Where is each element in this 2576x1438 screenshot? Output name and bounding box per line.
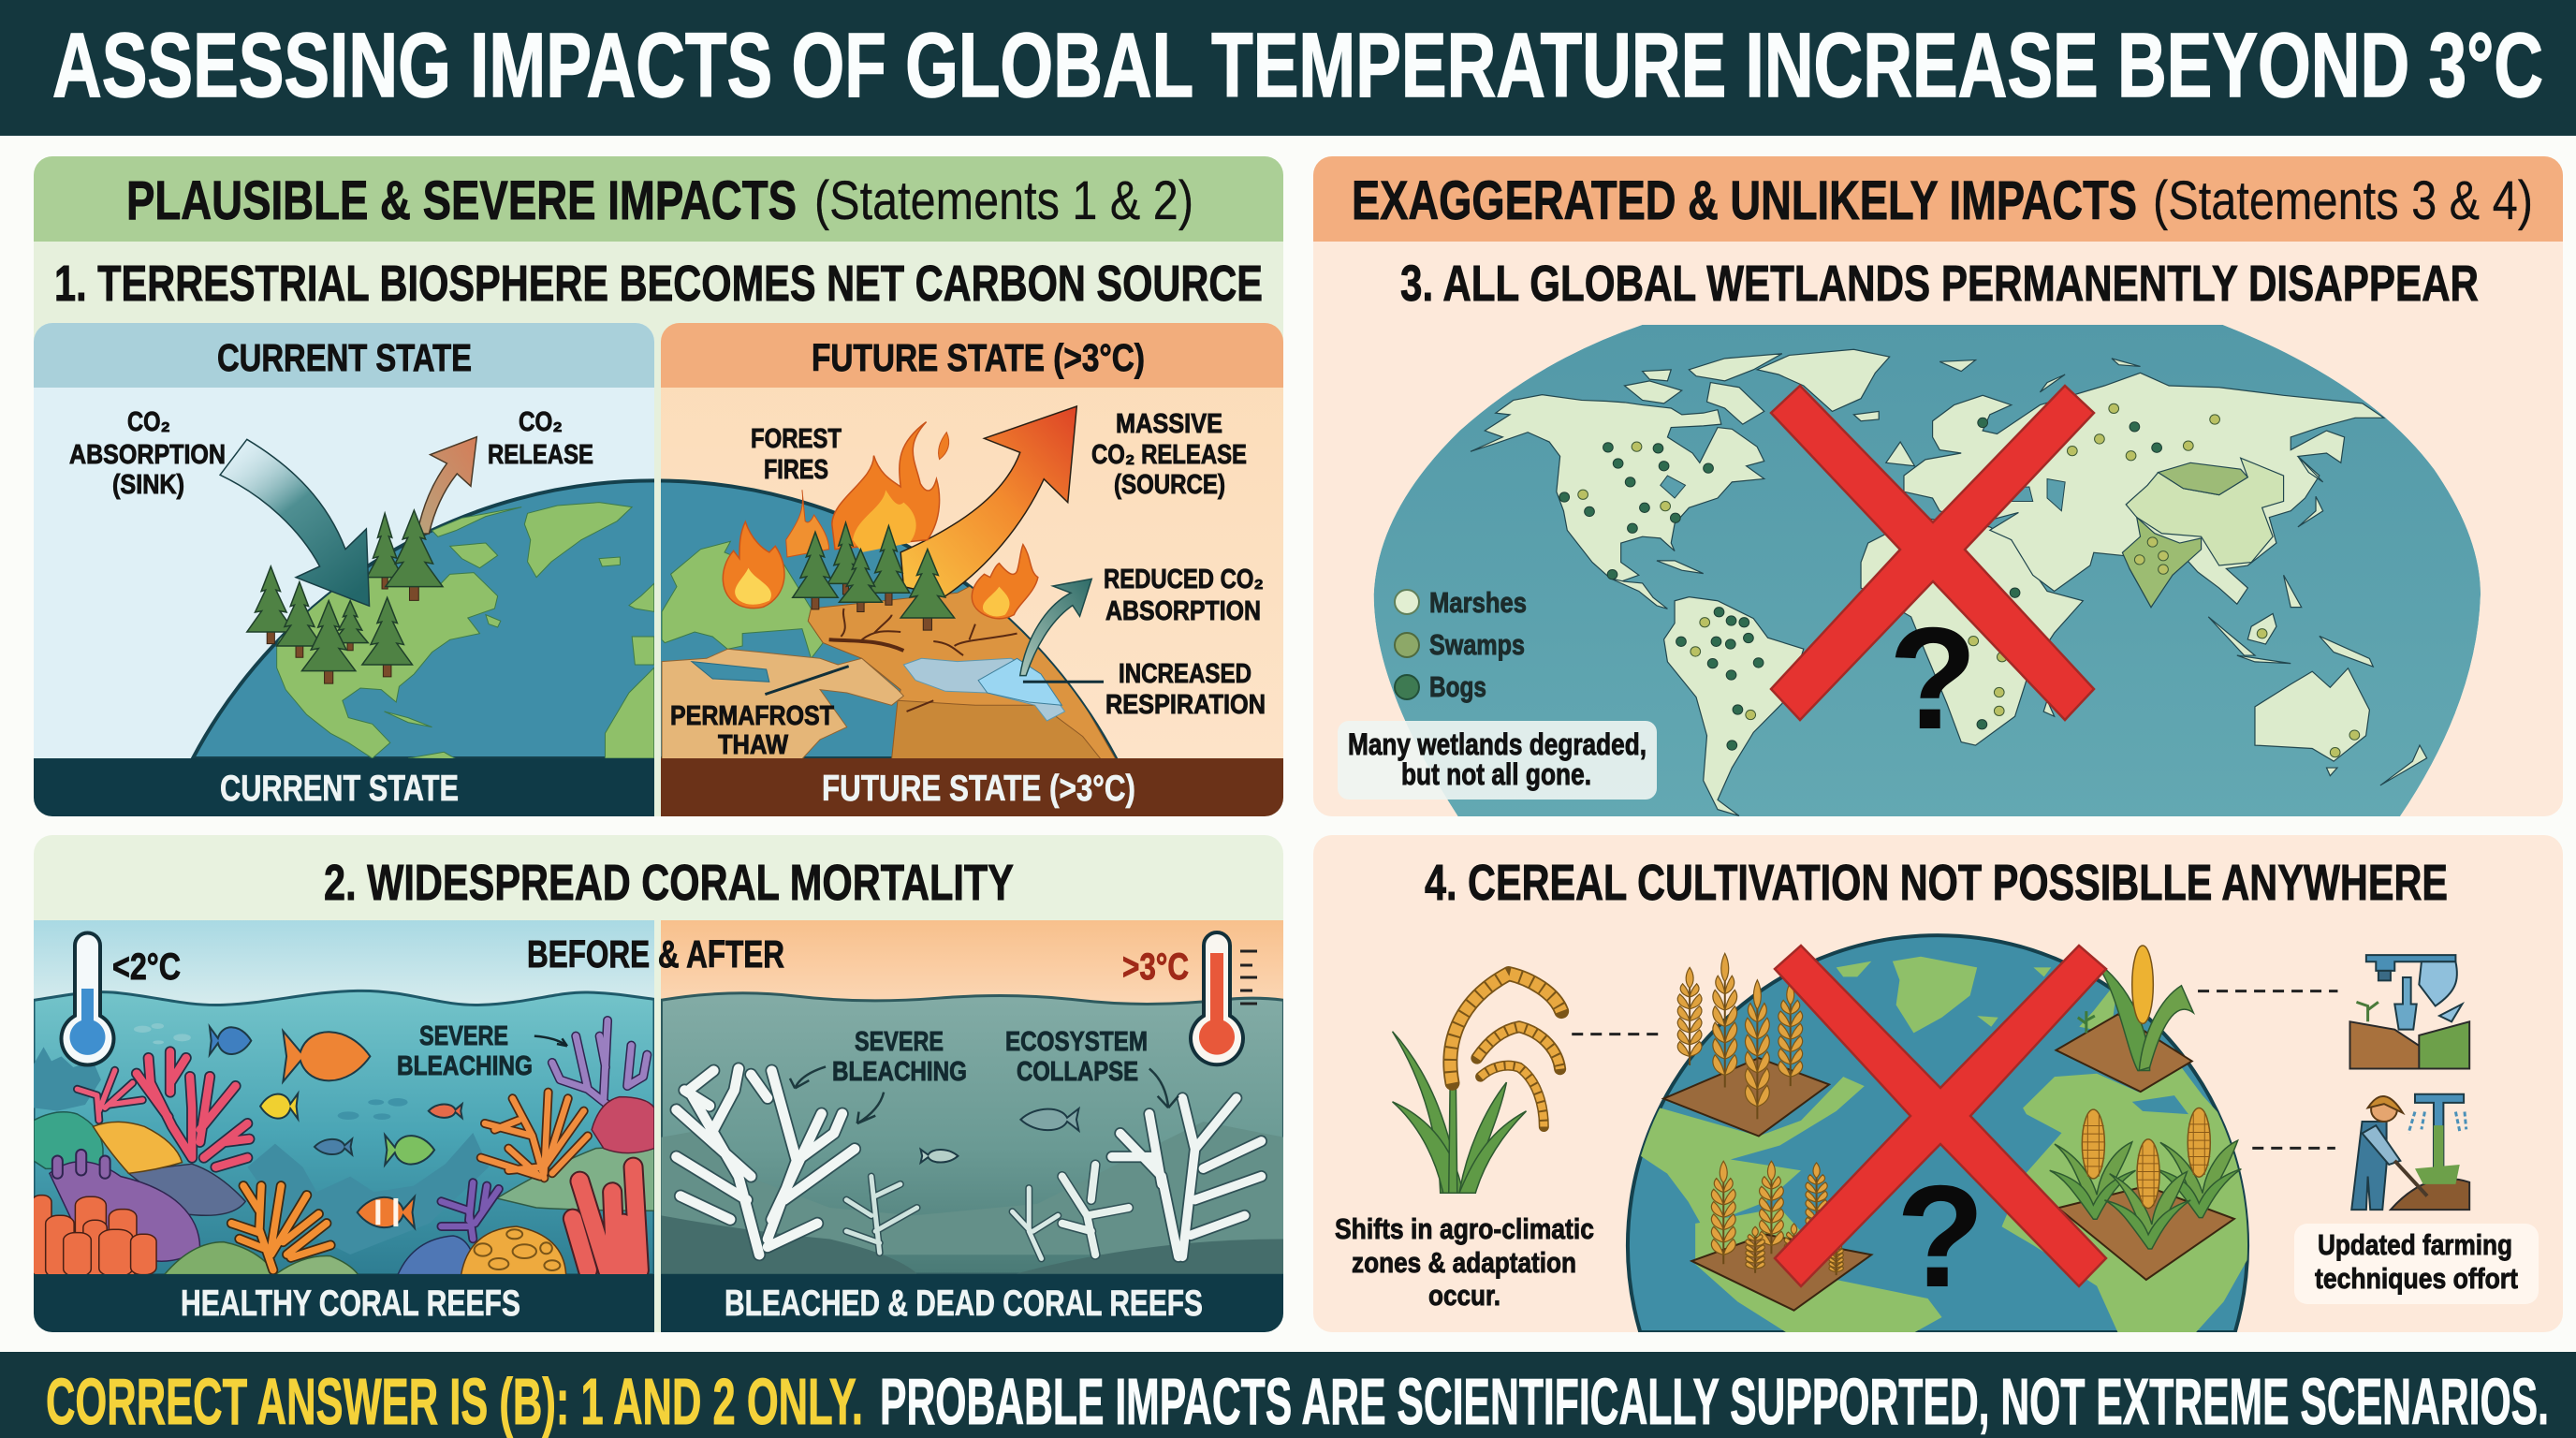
land masses bbox=[1471, 349, 2427, 815]
header labels: current and future: FUTURE STATE (>3°C) bbox=[812, 336, 1145, 379]
icon: large flames bbox=[786, 422, 949, 557]
panel: statement 2 coral mortality bbox=[32, 835, 1283, 1332]
labels: forest fires: FIRES bbox=[764, 455, 828, 485]
icon: farmer with sprinkler bbox=[2351, 1094, 2469, 1210]
labels: increased respiration: INCREASED bbox=[1119, 659, 1251, 689]
label: ecosystem collapse: COLLAPSE bbox=[1017, 1057, 1138, 1087]
arrows: bleaching and collapse leaders bbox=[790, 1066, 1178, 1123]
bottom label bars: coral bbox=[34, 1274, 1283, 1332]
heading: statement 1: 1. TERRESTRIAL BIOSPHERE BECOMES NET CARBON SOURCE bbox=[54, 256, 1263, 312]
labels: CO2 release bbox=[489, 411, 593, 464]
globe with crop fields bbox=[1625, 935, 2259, 1333]
label: severe bleaching right: BLEACHING bbox=[832, 1057, 967, 1087]
header labels: current and future bbox=[218, 343, 1144, 379]
callout: wetlands degraded: but not all gone. bbox=[1401, 757, 1591, 791]
icon: red cross over globe bbox=[1775, 946, 2106, 1286]
bottom label bars: CURRENT STATE bbox=[220, 769, 459, 809]
labels: CO2 absorption sink: ABSORPTION bbox=[69, 440, 226, 470]
legend: wetland types: Marshes bbox=[1429, 586, 1527, 619]
labels: CO2 absorption sink bbox=[69, 407, 226, 500]
dashed connectors bbox=[1572, 991, 2337, 1148]
labels: massive CO2 release: CO₂ RELEASE bbox=[1091, 440, 1247, 470]
labels: massive CO2 release: MASSIVE bbox=[1116, 409, 1222, 439]
labels: CO2 absorption sink: CO₂ bbox=[127, 407, 170, 437]
leader line: permafrost thaw bbox=[765, 667, 849, 695]
crop field: wheat lower bbox=[1691, 1161, 1871, 1311]
label: ecosystem collapse: ECOSYSTEM bbox=[1005, 1027, 1148, 1057]
label: before and after: BEFORE & AFTER bbox=[527, 932, 784, 976]
bottom label bars: FUTURE STATE (>3°C) bbox=[822, 769, 1135, 809]
header labels: current and future: CURRENT STATE bbox=[217, 336, 472, 379]
background reef silhouettes bbox=[662, 1122, 1283, 1255]
inland seas bbox=[1661, 476, 2065, 511]
icon: rice plant bbox=[1393, 974, 1561, 1193]
small background fish bbox=[134, 1023, 191, 1044]
bottom label bars bbox=[34, 758, 1283, 816]
label: below 2 degrees: <2°C bbox=[112, 946, 181, 988]
section heading: exaggerated and unlikely bbox=[1313, 156, 2563, 242]
labels: massive CO2 release bbox=[1091, 409, 1247, 500]
background reef silhouettes bbox=[34, 1047, 489, 1255]
arrow: CO2 release from forest bbox=[417, 437, 476, 534]
arrow: massive CO2 release bbox=[900, 406, 1076, 596]
callout: wetlands degraded bbox=[1338, 721, 1657, 800]
labels: increased respiration: RESPIRATION bbox=[1105, 690, 1266, 720]
label: ecosystem collapse bbox=[1005, 1027, 1148, 1087]
labels: permafrost thaw bbox=[671, 705, 835, 755]
panel: exaggerated and unlikely impacts, statement 3 bbox=[1313, 156, 2563, 819]
globe illustration: carbon sink and source bbox=[193, 480, 1116, 759]
text: agro-climatic shifts: occur. bbox=[1428, 1279, 1500, 1312]
wetland bog dots bbox=[1559, 418, 2161, 750]
bottom label bars: coral: BLEACHED & DEAD CORAL REEFS bbox=[724, 1284, 1203, 1324]
arrow: reduced CO2 absorption bbox=[1020, 579, 1091, 676]
labels: permafrost thaw: THAW bbox=[718, 730, 789, 760]
labels: permafrost thaw: PERMAFROST bbox=[670, 701, 834, 731]
labels: reduced CO2 absorption: ABSORPTION bbox=[1105, 596, 1261, 626]
icon: red cross over map bbox=[1771, 386, 2094, 720]
section heading: plausible and severe: PLAUSIBLE & SEVERE IMPACTS bbox=[126, 170, 797, 231]
text: agro-climatic shifts bbox=[1335, 1212, 1594, 1312]
icon: question mark on globe: ? bbox=[1896, 1155, 1984, 1317]
text: agro-climatic shifts: Shifts in agro-climatic bbox=[1335, 1212, 1594, 1245]
icon: right flame bbox=[972, 545, 1038, 619]
leader line: increased respiration bbox=[1023, 681, 1104, 683]
icon: irrigation and tools bbox=[2349, 955, 2469, 1069]
callout: updated farming techniques: techniques offort bbox=[2315, 1262, 2518, 1295]
legend: wetland types bbox=[1395, 586, 1527, 703]
seabed mounds bbox=[662, 1215, 1283, 1273]
icon: thermometer cool bbox=[62, 932, 113, 1065]
icon: thermometer hot bbox=[1191, 932, 1257, 1064]
callout: wetlands degraded: Many wetlands degraded, bbox=[1348, 727, 1647, 761]
scene: healthy coral reef bbox=[32, 920, 654, 1278]
legend: wetland types: Swamps bbox=[1429, 628, 1525, 661]
labels: reduced CO2 absorption bbox=[1105, 568, 1264, 621]
bottom label bars: coral: HEALTHY CORAL REEFS bbox=[181, 1284, 520, 1324]
crop field: maize top bbox=[2056, 946, 2193, 1092]
future state artwork: fires, trees and arrows bbox=[723, 406, 1104, 695]
labels: forest fires: FOREST bbox=[751, 424, 842, 454]
footer: correct answer banner: CORRECT ANSWER IS (B): 1 AND 2 ONLY. bbox=[46, 1365, 863, 1438]
corals: healthy left group bbox=[32, 1051, 359, 1278]
panel: statement 4 cereal cultivation bbox=[1313, 835, 2563, 1333]
label: severe bleaching left: SEVERE bbox=[419, 1021, 508, 1051]
fish: healthy reef bbox=[210, 1027, 462, 1228]
callout: updated farming techniques bbox=[2294, 1224, 2539, 1304]
labels: CO2 absorption sink: (SINK) bbox=[112, 470, 184, 500]
legend: wetland types: Bogs bbox=[1429, 670, 1486, 703]
arrow: CO2 absorption sink bbox=[220, 439, 370, 606]
labels: CO2 release: RELEASE bbox=[488, 440, 593, 470]
labels: massive CO2 release: (SOURCE) bbox=[1114, 470, 1225, 500]
crop field: maize lower bbox=[2050, 1108, 2241, 1280]
text: agro-climatic shifts: zones & adaptation bbox=[1352, 1246, 1576, 1279]
fish: bleached reef bbox=[921, 1108, 1078, 1163]
icon: left flame bbox=[723, 521, 784, 609]
panel: plausible and severe impacts, statement 1 bbox=[34, 156, 1283, 816]
corals: healthy right group bbox=[398, 1020, 654, 1275]
labels: forest fires bbox=[752, 428, 842, 479]
scene: bleached coral reef bbox=[661, 920, 1283, 1274]
bleached corals bbox=[676, 1069, 1261, 1258]
wetland swamp dots bbox=[1578, 404, 2360, 757]
heading: statement 2: 2. WIDESPREAD CORAL MORTALITY bbox=[324, 855, 1014, 911]
icon: question mark on map: ? bbox=[1889, 597, 1977, 759]
labels: increased respiration bbox=[1106, 663, 1265, 714]
label: severe bleaching left: BLEACHING bbox=[397, 1051, 533, 1081]
crop field: wheat bbox=[1663, 953, 1829, 1137]
label: severe bleaching right: SEVERE bbox=[855, 1027, 944, 1057]
section heading: plausible and severe: (Statements 1 & 2) bbox=[814, 170, 1193, 231]
section heading: exaggerated and unlikely: EXAGGERATED & UNLIKELY IMPACTS bbox=[1352, 170, 2137, 231]
world map of wetlands bbox=[1374, 325, 2481, 819]
label: severe bleaching left bbox=[397, 1021, 533, 1081]
label: above 3 degrees: >3°C bbox=[1122, 946, 1189, 988]
labels: CO2 release: CO₂ bbox=[519, 407, 563, 437]
China, Mongolia and India regions bbox=[2122, 458, 2284, 608]
footer: correct answer banner bbox=[0, 1352, 2576, 1438]
panel backgrounds: current and future state bbox=[34, 323, 1283, 758]
trees: current forest bbox=[247, 510, 443, 683]
labels: reduced CO2 absorption: REDUCED CO₂ bbox=[1104, 565, 1264, 594]
arrow: severe bleaching leader bbox=[534, 1036, 567, 1046]
trees: future forest bbox=[793, 522, 955, 630]
callout: updated farming techniques: Updated farming bbox=[2318, 1228, 2512, 1261]
section heading: plausible and severe bbox=[34, 156, 1283, 242]
current state artwork: trees and carbon arrows bbox=[220, 437, 476, 683]
label: severe bleaching right bbox=[832, 1027, 967, 1087]
